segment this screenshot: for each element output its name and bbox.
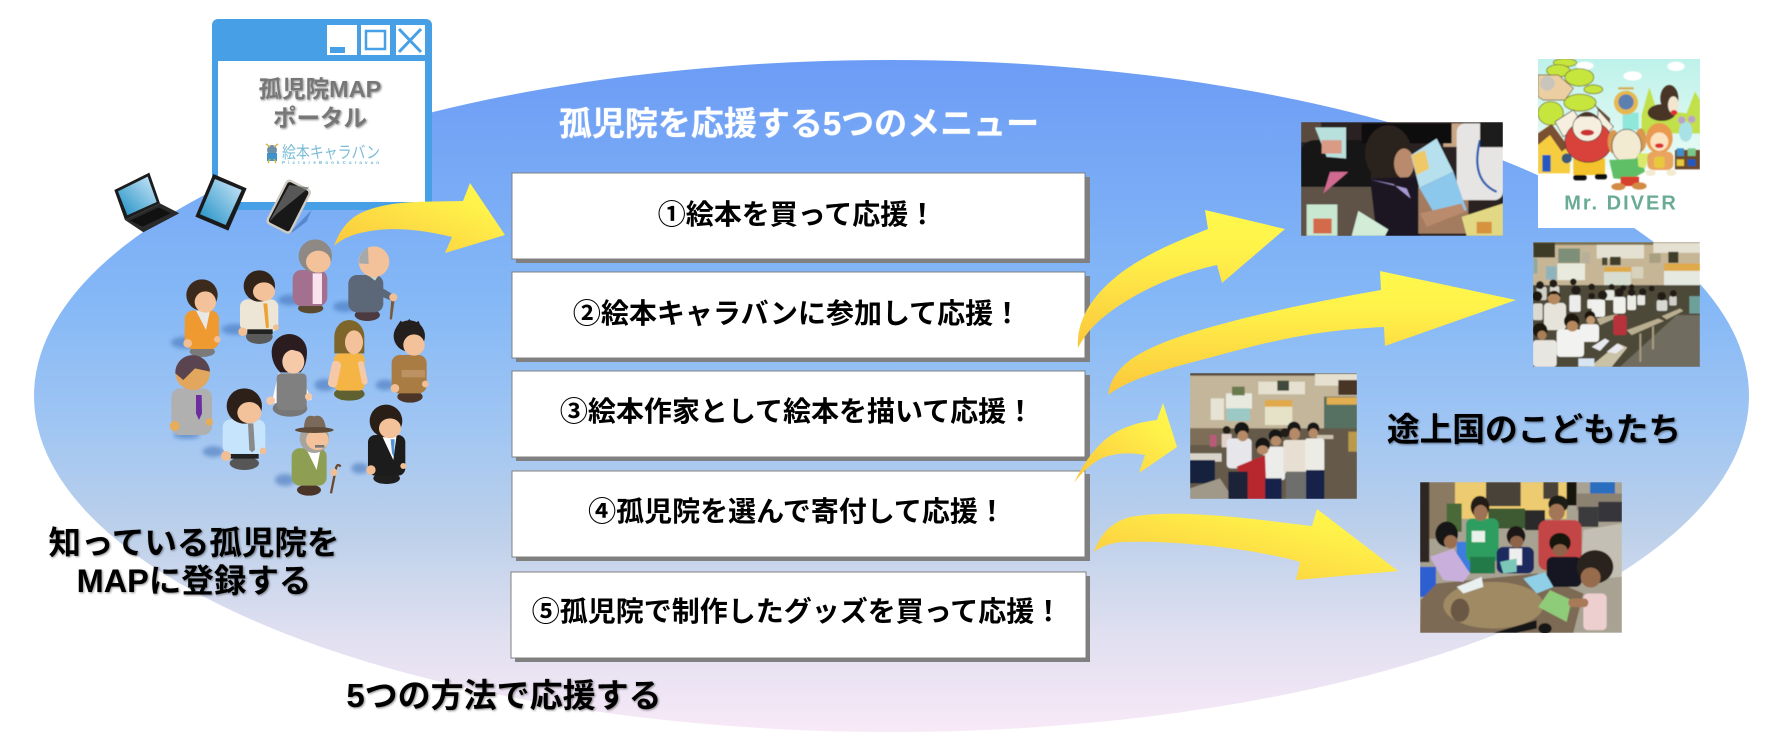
illustration: Mr. DIVER book cover: Mr. DIVER <box>1564 192 1678 214</box>
picture book caravan logo: PictureBookCaravan <box>282 160 379 165</box>
menu box 4 <box>512 471 1090 561</box>
person: light blue shirt, grey tie <box>203 388 266 470</box>
picture book caravan logo <box>266 143 380 165</box>
menu box 3: ③絵本作家として絵本を描いて応援！ <box>560 396 1034 427</box>
person: bald man with cane <box>333 246 397 321</box>
menu box 4: ④孤児院を選んで寄付して応援！ <box>588 496 1006 527</box>
menu box 3 <box>512 371 1090 461</box>
photo: classroom with students at desks <box>1533 242 1700 367</box>
icon: tablet <box>195 174 247 231</box>
portal title: ポータル <box>273 105 367 131</box>
person: woman with grey vest <box>266 334 312 417</box>
arrow: menu 4 to photo <box>1074 403 1177 483</box>
icon: smartphone <box>265 178 312 235</box>
menu box 5 <box>511 572 1090 662</box>
menu box 1 <box>512 173 1090 263</box>
label: register on map <box>49 525 339 599</box>
label: five ways: 5つの方法で応援する <box>346 677 662 714</box>
menu box 2: ②絵本キャラバンに参加して応援！ <box>573 298 1021 329</box>
menu box 2 <box>512 272 1090 362</box>
portal title: 孤児院MAP <box>259 76 381 102</box>
arrow: menu 5 to photo <box>1094 509 1398 580</box>
person: grey suit, purple tie <box>170 355 213 439</box>
photo: children with picture books at table <box>1420 482 1622 633</box>
crowd of people <box>170 239 429 496</box>
photo: children reading picture books <box>1301 122 1503 236</box>
portal title <box>259 76 381 131</box>
menu box 5: ⑤孤児院で制作したグッズを買って応援！ <box>532 595 1062 627</box>
arrow: menu 2 to photo <box>1078 210 1285 348</box>
person: black suit, blue tie <box>351 405 406 484</box>
menu box 1: ①絵本を買って応援！ <box>658 199 936 230</box>
label: children in developing countries: 途上国のこどもたち <box>1387 411 1681 448</box>
devices <box>114 173 312 235</box>
icon: laptop <box>114 173 179 232</box>
person: beige shirt, orange tie <box>222 270 279 344</box>
picture book caravan logo: 絵本キャラバン <box>282 143 380 162</box>
label: register on map: MAPに登録する <box>77 563 311 599</box>
arrow: map to menu <box>334 183 505 253</box>
front row <box>1544 303 1566 330</box>
back row <box>1537 287 1547 300</box>
person: green jacket with hat <box>275 416 341 496</box>
label: register on map: 知っている孤児院を <box>49 525 339 561</box>
illustration: Mr. DIVER book cover <box>1538 59 1700 228</box>
heading: five menus: 孤児院を応援する5つのメニュー <box>559 105 1039 142</box>
portal window <box>212 19 432 210</box>
tables <box>1627 318 1664 335</box>
arrow: menu 3 to photo <box>1108 271 1516 395</box>
person: grey-haired woman in purple <box>278 239 332 313</box>
photo: group of students in classroom <box>1190 373 1357 499</box>
person: orange cardigan <box>171 279 221 357</box>
window buttons <box>327 25 425 55</box>
person: woman in yellow top <box>314 320 368 401</box>
person: brown sweater <box>376 319 429 403</box>
